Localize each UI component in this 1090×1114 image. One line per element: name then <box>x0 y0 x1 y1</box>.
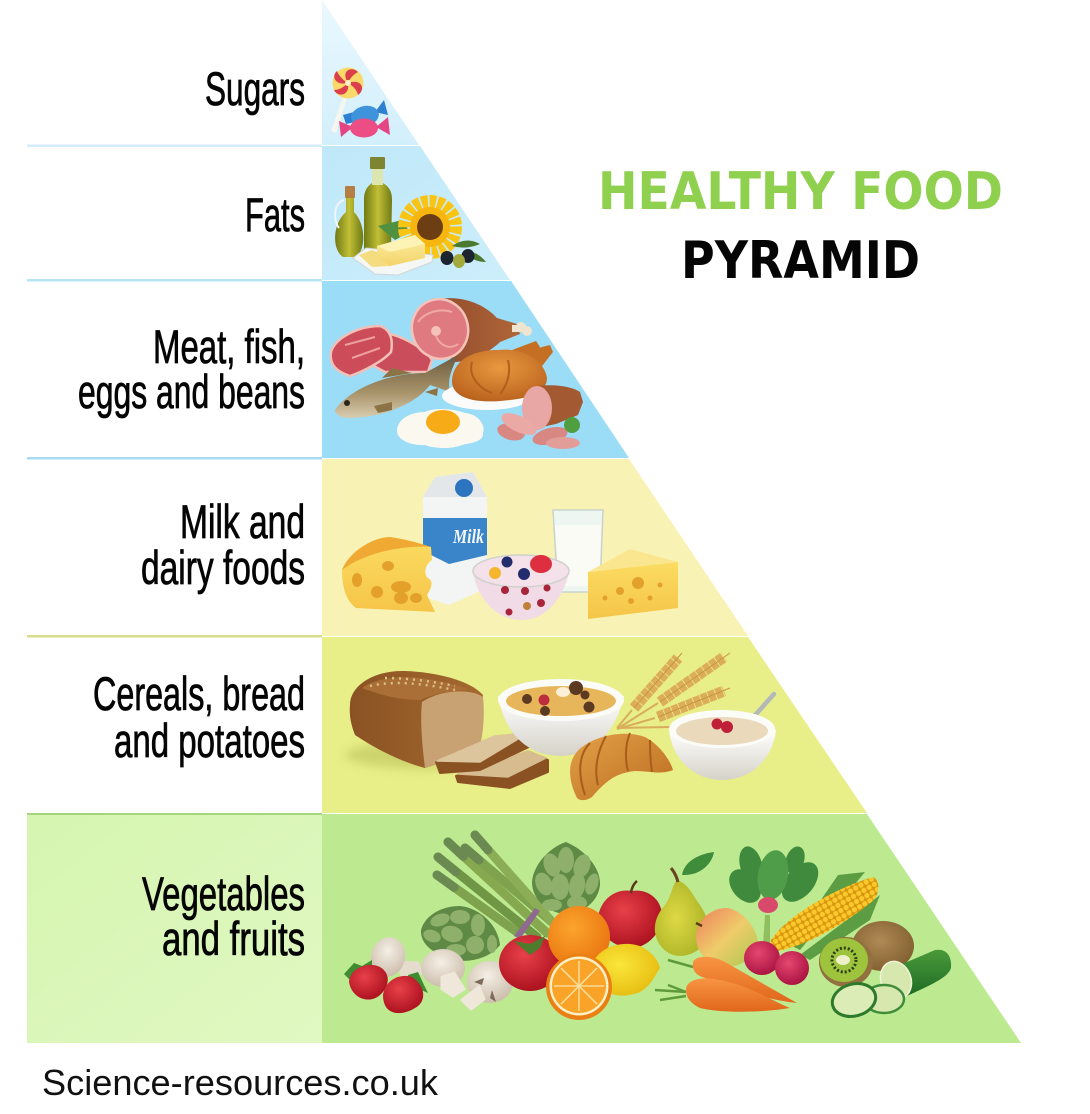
panel: vegetables tier <box>27 814 1021 1043</box>
icon: whole orange <box>548 906 610 968</box>
icon: fried egg <box>397 409 484 448</box>
title <box>598 162 1003 291</box>
label: meat, fish, eggs and beans: eggs and beans <box>78 365 305 418</box>
icon: ham leg <box>405 293 532 365</box>
label: milk and dairy foods: Milk and <box>180 495 305 548</box>
title: PYRAMID <box>681 231 920 291</box>
icon: cereal bowl <box>498 679 624 756</box>
label: meat, fish, eggs and beans: Meat, fish, <box>153 320 305 373</box>
label: vegetables and fruits <box>142 867 305 965</box>
icon: sausage and slices <box>495 385 583 449</box>
icon: olive oil bottle <box>364 157 392 250</box>
icon: butter on plate with sunflower and olives <box>353 203 486 275</box>
icon: radishes <box>744 941 809 985</box>
icon: bread loaf and slices <box>345 671 548 788</box>
icon: roast chicken on plate <box>442 341 553 410</box>
icon: lemon <box>592 944 660 996</box>
panel: milk tier <box>27 459 748 638</box>
icon: tomato <box>499 908 561 991</box>
label: milk and dairy foods: dairy foods <box>141 541 305 594</box>
label: cereals, bread and potatoes: and potatoes <box>114 714 305 767</box>
icon: milk glass <box>553 510 603 592</box>
icon: artichoke back <box>532 842 601 918</box>
icon: kiwi fruit <box>819 921 914 987</box>
icon: wrapped candies <box>339 100 390 138</box>
icon: pear <box>655 852 714 956</box>
icon: apple <box>598 881 662 948</box>
label: meat, fish, eggs and beans <box>78 320 305 418</box>
icon: yoghurt bowl <box>473 555 569 620</box>
title: HEALTHY FOOD <box>598 162 1003 222</box>
icon: wheat ears <box>617 653 730 729</box>
panel: meat tier <box>27 281 629 460</box>
label: milk and dairy foods <box>141 495 305 594</box>
icon: radish leaves <box>723 844 826 945</box>
icon: corn cob <box>771 872 880 960</box>
icon: steaks <box>331 326 432 376</box>
label: cereals, bread and potatoes <box>93 667 305 767</box>
label: vegetables and fruits: and fruits <box>162 912 305 965</box>
icon: artichoke front <box>421 906 500 961</box>
source credit: Science-resources.co.uk <box>42 1062 439 1103</box>
icon: milk carton: Milk <box>452 526 484 548</box>
icon: swiss cheese wedge <box>342 537 435 612</box>
label: fats: Fats <box>245 188 305 241</box>
panel: fats tier <box>27 146 510 282</box>
icon: orange half <box>546 954 612 1020</box>
icon: asparagus <box>437 835 553 937</box>
panel: cereals tier <box>27 637 867 816</box>
icon: porridge bowl <box>669 694 776 780</box>
icon: mushrooms <box>366 933 513 1009</box>
icon: cucumber <box>829 950 951 1021</box>
icon: milk carton <box>423 472 487 605</box>
icon: lollipop <box>331 68 364 133</box>
icon: blush apple <box>696 908 758 967</box>
icon: olive oil cruet <box>335 186 363 257</box>
icon: carrots <box>655 957 797 1012</box>
icon: fish <box>335 355 458 418</box>
label: sugars: Sugars <box>205 62 305 115</box>
icon: croissant <box>570 733 673 800</box>
label: cereals, bread and potatoes: Cereals, bread <box>93 667 305 720</box>
label: vegetables and fruits: Vegetables <box>142 867 305 920</box>
panel: sugars tier <box>27 0 419 147</box>
icon: cheese wedge <box>588 549 678 619</box>
icon: strawberries <box>344 960 428 1013</box>
